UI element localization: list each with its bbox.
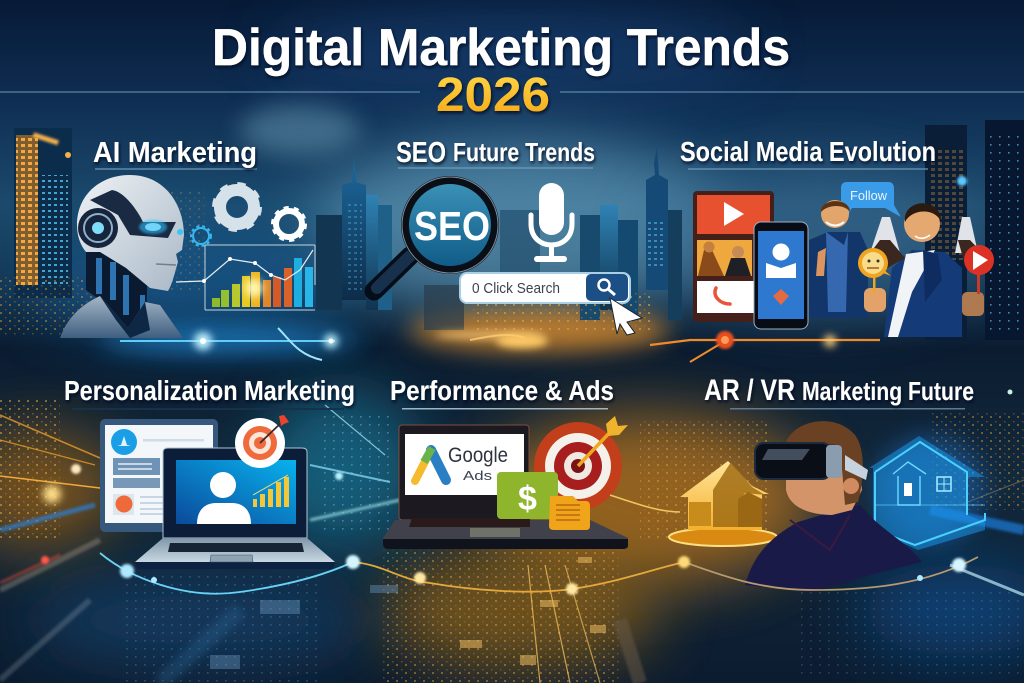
icon: money card bbox=[497, 472, 558, 519]
icon: money card: $ bbox=[518, 480, 537, 518]
speech bubble: Follow bbox=[841, 182, 901, 218]
heading: Future Trends bbox=[453, 137, 595, 167]
person right bbox=[864, 203, 984, 337]
phone bbox=[754, 222, 808, 329]
panel: AR / VR Marketing Future bbox=[669, 374, 985, 592]
icon: gold house bbox=[669, 461, 777, 546]
logo: Google Ads bbox=[415, 444, 508, 483]
heading bbox=[396, 137, 595, 169]
heading: SEO bbox=[396, 137, 446, 169]
icon: shape accents bbox=[868, 217, 985, 270]
tablet profile card bbox=[100, 419, 218, 532]
laptop bbox=[135, 448, 335, 569]
logo: Google Ads: Google bbox=[448, 444, 508, 467]
heading: AR / VR bbox=[704, 374, 795, 407]
panel: AI Marketing bbox=[60, 137, 315, 338]
year: 2026 bbox=[436, 69, 550, 122]
title: Digital Marketing Trends bbox=[212, 19, 790, 77]
heading: Performance & Ads bbox=[390, 375, 614, 406]
heading: Social Media Evolution bbox=[680, 136, 936, 167]
icon: magnifier: SEO bbox=[414, 203, 490, 249]
search bar: 0 Click Search bbox=[472, 281, 560, 297]
icon: target bbox=[235, 415, 289, 468]
icon: microphone bbox=[531, 183, 572, 262]
panel: Personalization Marketing bbox=[64, 375, 355, 569]
icon: play sign bbox=[964, 245, 994, 294]
horizontal top glow line bbox=[0, 91, 1024, 93]
laptop bbox=[383, 425, 628, 549]
speech bubble: Follow: Follow bbox=[850, 189, 888, 203]
icon: emoji sign bbox=[858, 248, 891, 294]
search bar bbox=[460, 273, 630, 303]
title bbox=[212, 19, 790, 122]
icon: magnifier bbox=[374, 177, 498, 291]
heading: Personalization Marketing bbox=[64, 375, 355, 406]
icon: folder bbox=[549, 496, 590, 530]
center skyline bbox=[316, 146, 682, 330]
icon: cursor bbox=[610, 298, 642, 335]
heading bbox=[704, 374, 974, 410]
heading: Marketing Future bbox=[802, 376, 974, 406]
floor tiles bbox=[0, 557, 606, 669]
panel: Performance & Ads bbox=[383, 375, 628, 549]
tablet bbox=[693, 191, 774, 322]
icon: gears bbox=[191, 185, 305, 246]
bar chart bbox=[176, 245, 315, 310]
robot bbox=[60, 175, 184, 338]
city lights bbox=[0, 190, 1024, 683]
left tower bbox=[14, 128, 72, 298]
divider glows: mid row bbox=[120, 328, 880, 362]
person with VR headset bbox=[745, 421, 922, 592]
heading: AI Marketing bbox=[93, 137, 257, 169]
perspective light streaks bbox=[0, 405, 1024, 683]
bottom connector curve bbox=[41, 176, 1012, 595]
panel: Social Media Evolution bbox=[680, 136, 994, 337]
person left bbox=[809, 200, 868, 318]
panel: SEO Future Trends bbox=[374, 137, 642, 335]
icon: target bbox=[534, 416, 628, 510]
logo: Google Ads: Ads bbox=[463, 468, 493, 483]
icon: blue hologram house bbox=[869, 435, 985, 550]
right skyline bbox=[925, 120, 1024, 340]
